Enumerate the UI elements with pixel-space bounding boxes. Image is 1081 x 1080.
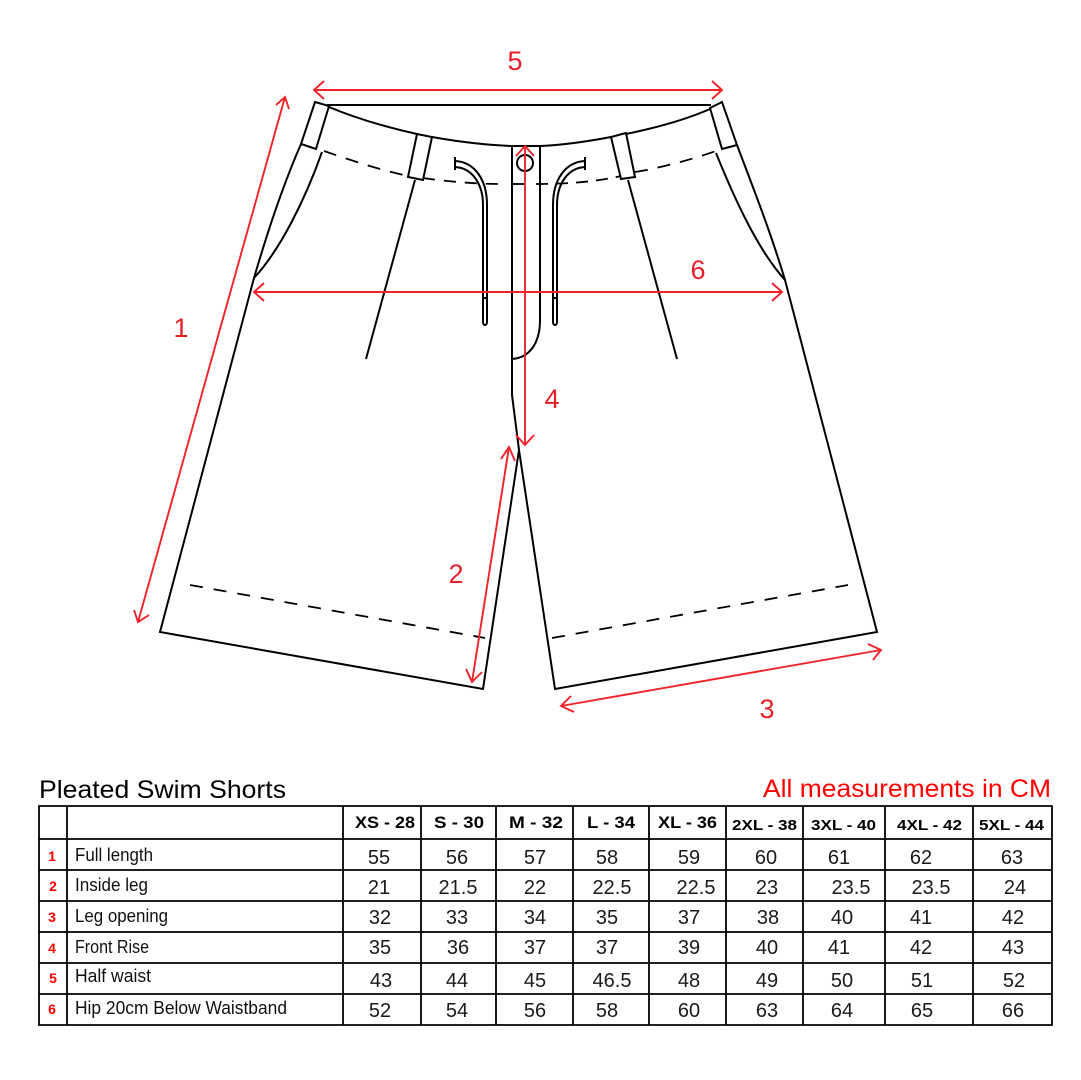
measurement numbers	[173, 46, 775, 724]
row: hip 20cm below waistband: 54	[446, 1000, 468, 1022]
row: front rise	[48, 937, 1024, 959]
row: leg opening: 35	[596, 907, 618, 929]
row: full length: 57	[524, 847, 546, 869]
row: half waist: 50	[831, 970, 853, 992]
button	[517, 155, 533, 171]
row: half waist: 44	[446, 970, 468, 992]
row: full length: 59	[678, 847, 700, 869]
row: inside leg: 2	[49, 878, 57, 894]
hem stitching	[190, 585, 848, 638]
row: inside leg: 23	[756, 877, 778, 899]
measurement numbers: 3	[759, 694, 775, 724]
measurement numbers: 2	[448, 559, 464, 589]
row: hip 20cm below waistband: 58	[596, 1000, 618, 1022]
row: inside leg: 22.5	[593, 877, 631, 899]
row: hip 20cm below waistband: 60	[678, 1000, 700, 1022]
row: full length	[48, 845, 1023, 869]
row: hip 20cm below waistband: Hip 20cm Below Waistband	[75, 998, 287, 1018]
table header row: XS - 28	[355, 814, 415, 832]
belt loops	[301, 102, 737, 180]
row: inside leg: 24	[1004, 877, 1026, 899]
row: leg opening	[48, 906, 1024, 929]
row: half waist: 46.5	[593, 970, 631, 992]
row: half waist: 49	[756, 970, 778, 992]
row: full length: 62	[910, 847, 932, 869]
left drawstring	[455, 157, 487, 325]
row: hip 20cm below waistband	[48, 998, 1024, 1022]
row: front rise: 37	[596, 937, 618, 959]
pleats	[366, 180, 677, 359]
table header row: 2XL - 38	[732, 817, 797, 834]
row: inside leg: Inside leg	[75, 875, 148, 895]
table header row	[355, 814, 1045, 834]
row: full length: 55	[368, 847, 390, 869]
row: leg opening: 33	[446, 907, 468, 929]
row: front rise: 42	[910, 937, 932, 959]
row: full length: 58	[596, 847, 618, 869]
row: front rise: 39	[678, 937, 700, 959]
table header row: 5XL - 44	[979, 817, 1045, 834]
row: hip 20cm below waistband: 63	[756, 1000, 778, 1022]
arrow 5: half waist	[314, 81, 722, 99]
row: full length: 63	[1001, 847, 1023, 869]
title: Pleated Swim Shorts	[39, 776, 286, 804]
row: leg opening: 41	[910, 907, 932, 929]
table header row: S - 30	[434, 814, 484, 832]
row: front rise: 43	[1002, 937, 1024, 959]
table header row: XL - 36	[658, 814, 717, 832]
row: leg opening: 42	[1002, 907, 1024, 929]
row: half waist: 51	[911, 970, 933, 992]
row: front rise: 40	[756, 937, 778, 959]
row: half waist: 45	[524, 970, 546, 992]
measurement numbers: 6	[690, 255, 706, 285]
row: half waist: 43	[370, 970, 392, 992]
table grid	[39, 806, 1052, 1025]
row: front rise: 4	[48, 940, 56, 956]
row: front rise: 37	[524, 937, 546, 959]
row: half waist: 5	[49, 970, 57, 986]
row: full length: 61	[828, 847, 850, 869]
row: half waist: Half waist	[75, 966, 151, 986]
row: inside leg: 21	[368, 877, 390, 899]
row: front rise: 36	[447, 937, 469, 959]
size table	[39, 806, 1052, 1025]
shorts technical drawing	[160, 102, 877, 689]
row: hip 20cm below waistband: 66	[1002, 1000, 1024, 1022]
row: inside leg: 22	[524, 877, 546, 899]
row: front rise: 35	[369, 937, 391, 959]
table header row: 3XL - 40	[811, 817, 876, 834]
row: inside leg: 21.5	[439, 877, 477, 899]
fly	[512, 146, 540, 359]
row: inside leg: 23.5	[912, 877, 950, 899]
row: inside leg	[49, 875, 1026, 899]
row: hip 20cm below waistband: 6	[48, 1001, 56, 1017]
arrow 2: inside leg	[466, 447, 515, 682]
row: hip 20cm below waistband: 65	[911, 1000, 933, 1022]
row: front rise: Front Rise	[75, 937, 149, 957]
row: full length: 56	[446, 847, 468, 869]
arrow 1: full length	[134, 97, 289, 622]
arrow 3: leg opening	[561, 644, 881, 712]
row: full length: 60	[755, 847, 777, 869]
table header row: L - 34	[587, 814, 636, 832]
row: leg opening: Leg opening	[75, 906, 168, 926]
pockets	[254, 152, 785, 280]
measurement numbers: 4	[544, 384, 560, 414]
shorts outline	[160, 105, 877, 689]
row: hip 20cm below waistband: 52	[369, 1000, 391, 1022]
waistband stitching	[324, 151, 716, 184]
row: leg opening: 3	[48, 909, 56, 925]
arrow 6: hip	[254, 283, 782, 301]
row: leg opening: 34	[524, 907, 546, 929]
units note: All measurements in CM	[763, 775, 1051, 803]
row: half waist: 48	[678, 970, 700, 992]
row: leg opening: 40	[831, 907, 853, 929]
row: half waist	[49, 966, 1025, 992]
table header row: M - 32	[509, 814, 563, 832]
row: hip 20cm below waistband: 64	[831, 1000, 853, 1022]
waistband curve	[329, 107, 710, 146]
row: full length: 1	[48, 848, 56, 864]
measurement numbers: 5	[507, 46, 523, 76]
row: hip 20cm below waistband: 56	[524, 1000, 546, 1022]
table header row: 4XL - 42	[897, 817, 962, 834]
right drawstring	[553, 157, 585, 325]
row: front rise: 41	[828, 937, 850, 959]
row: inside leg: 22.5	[677, 877, 715, 899]
row: half waist: 52	[1003, 970, 1025, 992]
row: leg opening: 37	[678, 907, 700, 929]
row: inside leg: 23.5	[832, 877, 870, 899]
row: leg opening: 32	[369, 907, 391, 929]
row: full length: Full length	[75, 845, 153, 865]
arrow 4: front rise	[516, 146, 534, 445]
row: leg opening: 38	[757, 907, 779, 929]
measurement numbers: 1	[173, 313, 189, 343]
